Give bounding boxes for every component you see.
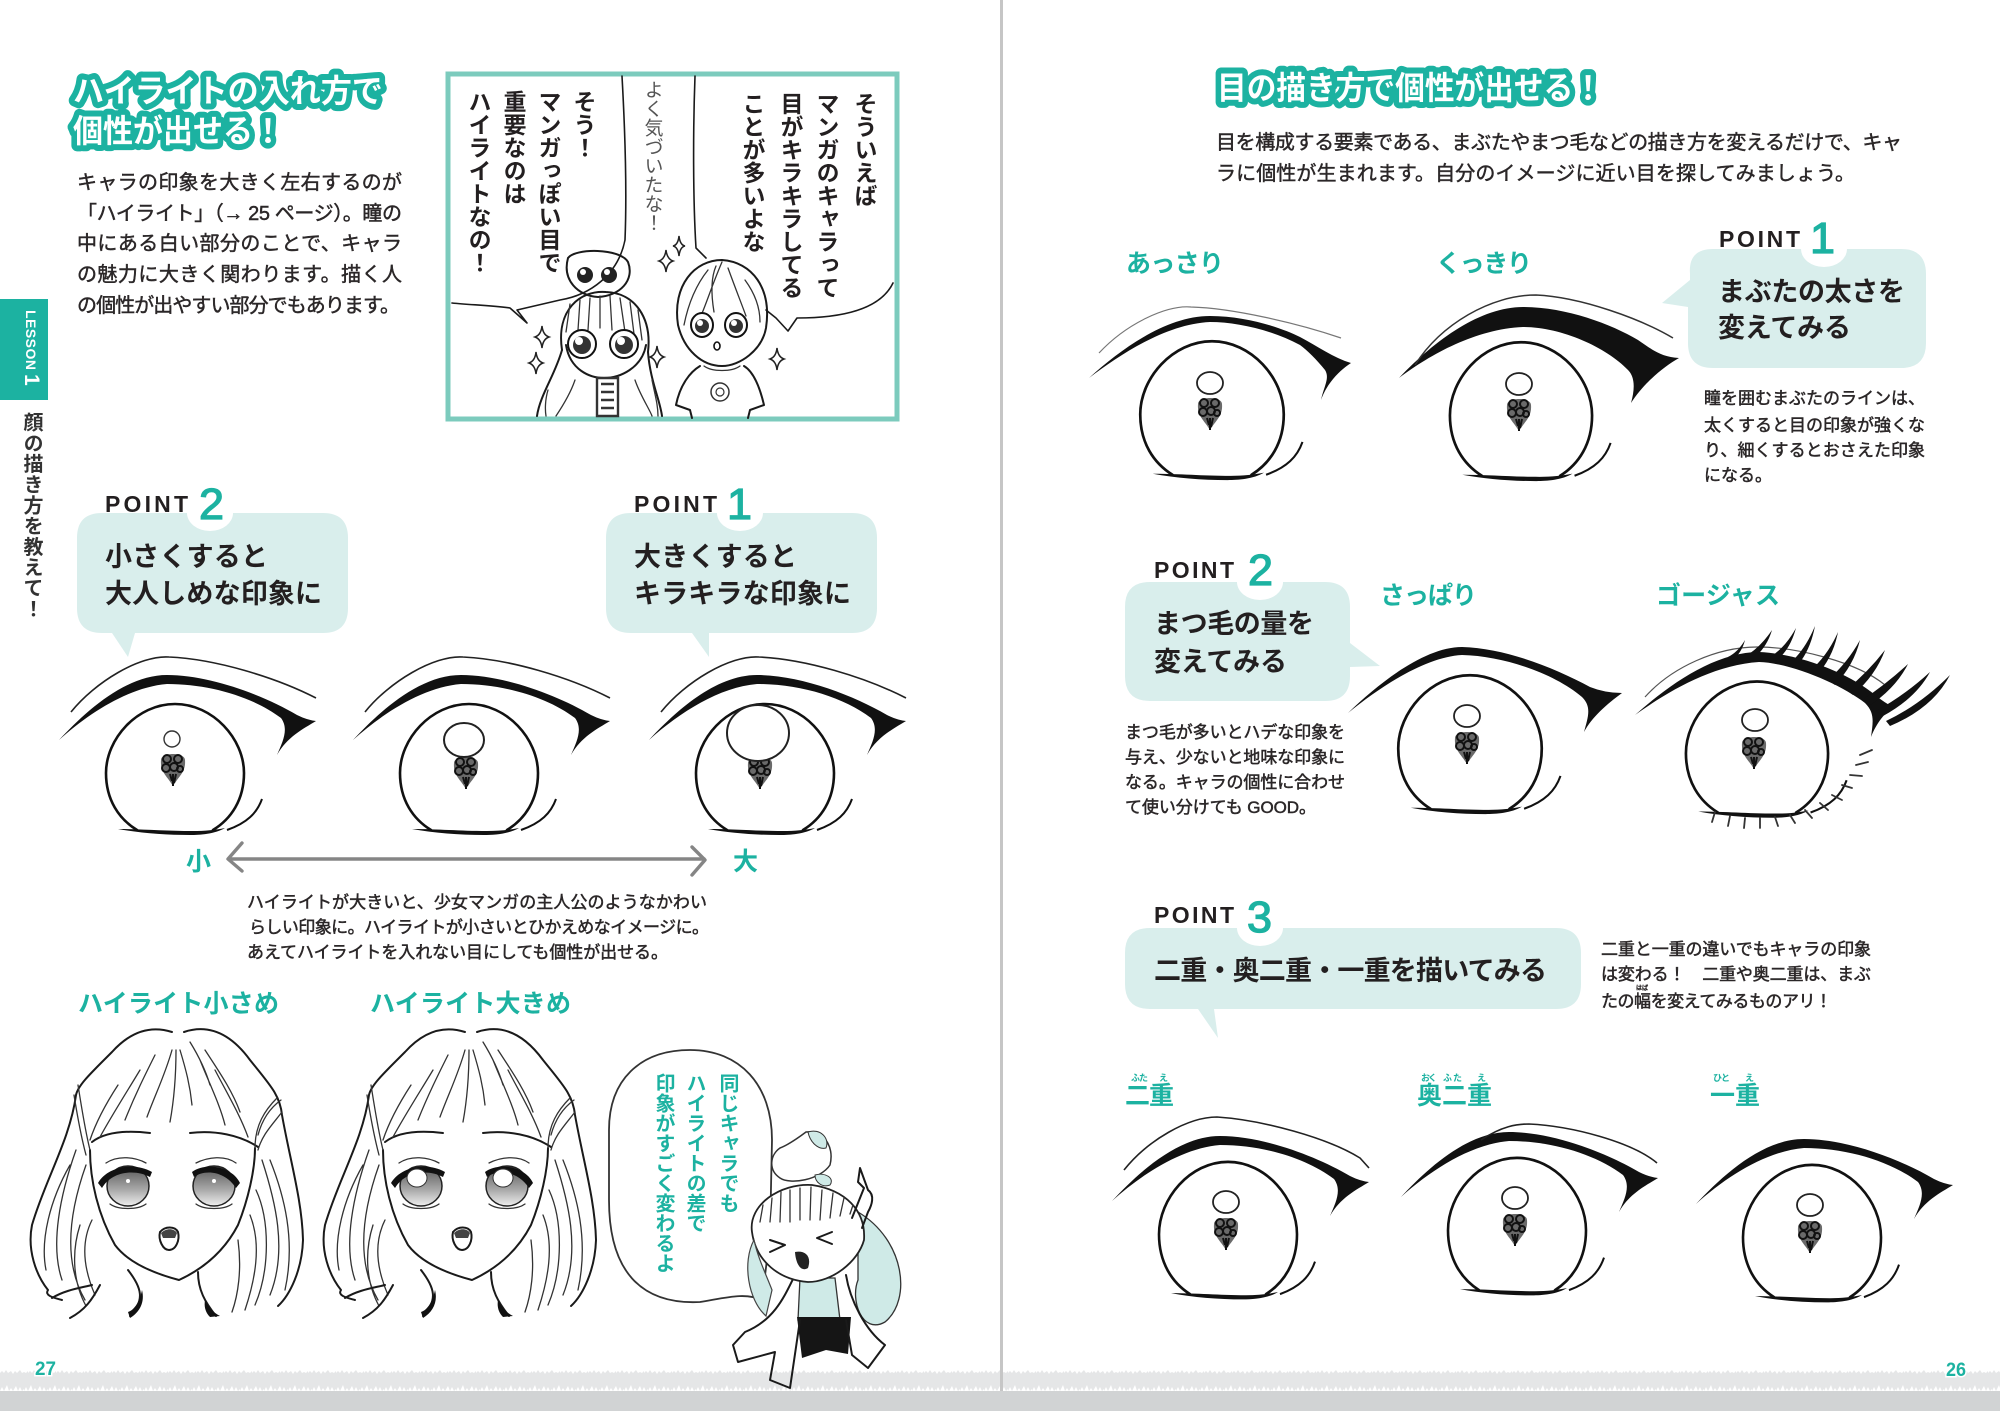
- heading: double eyelid: え: [1159, 1073, 1168, 1083]
- heading: double eyelid: ふた: [1131, 1073, 1148, 1083]
- text: lash note: なる。キャラの個性に合わせ: [1125, 773, 1345, 792]
- heading: single eyelid: 一重: [1710, 1082, 1760, 1110]
- sparkles: [529, 236, 784, 374]
- text: highlight size explanation: ハイライトが大きいと、少女マンガの主人公のようなかわい: [247, 893, 707, 912]
- callout: point 2 right: まつ毛の量を: [1154, 609, 1314, 639]
- sidebar tab: lesson 1: [0, 299, 48, 400]
- callout: point 1 left: キラキラな印象に: [634, 579, 851, 609]
- eye: thick lid: [1399, 295, 1679, 481]
- left title: ハイライトの入れ方で: [73, 73, 383, 109]
- heading: plain lashes: さっぱり: [1380, 582, 1477, 610]
- callout: point 1 left: POINT: [634, 491, 717, 517]
- arrow: small to large: [228, 843, 705, 875]
- text: eyelid thickness note: り、細くするとおさえた印象: [1704, 441, 1925, 460]
- text: eyelid thickness note: [1704, 389, 1925, 485]
- callout: point 1 right: POINT: [1719, 226, 1800, 252]
- callout: point 3: 3: [1247, 893, 1272, 942]
- footer torn-paper band: [0, 1370, 2000, 1411]
- heading: inner double eyelid: え: [1477, 1073, 1486, 1083]
- left intro text: の魅力に大きく関わります。描く人: [77, 263, 402, 286]
- left title: 個性が出せる！: [73, 113, 283, 149]
- callout: point 1 left: 1: [727, 480, 752, 529]
- callout: point 1 right: 変えてみる: [1718, 313, 1851, 343]
- speech: boy: マンガのキャラって: [813, 92, 839, 299]
- speech: girl: マンガっぽい目で: [535, 90, 561, 274]
- speech bubble: same character comment: 印象がすごく変わるよ: [652, 1073, 675, 1273]
- sidebar vertical chapter title: 顔の描き方を教えて！: [20, 412, 43, 619]
- eye: few lashes: [1348, 647, 1622, 814]
- heading: inner double eyelid: おく: [1421, 1073, 1437, 1083]
- callout: point 2 right: 2: [1248, 546, 1273, 595]
- eye: many lashes: [1635, 626, 1950, 828]
- speech bubble: same character comment: 同じキャラでも: [716, 1073, 738, 1213]
- text: eyelid thickness note: 太くすると目の印象が強くな: [1704, 416, 1925, 435]
- callout: point 1 right: 1: [1810, 214, 1835, 263]
- text: lash note: 与え、少ないと地味な印象に: [1125, 748, 1345, 767]
- callout: point 2 left: 2: [199, 480, 224, 529]
- eye: small highlight: [59, 657, 316, 835]
- text: eyelid thickness note: になる。: [1704, 466, 1772, 485]
- eye: medium highlight: [353, 657, 610, 835]
- text: lash note: まつ毛が多いとハデな印象を: [1125, 722, 1345, 742]
- lower lashes: [1712, 750, 1872, 828]
- callout: point 1 right: [1662, 214, 1926, 368]
- speech bubble: same character comment: ハイライトの差で: [683, 1073, 706, 1233]
- right title: 目の描き方で個性が出せる！: [1217, 70, 1603, 106]
- callout: point 1 left: 大きくすると: [634, 542, 797, 572]
- character: boy: [676, 260, 767, 418]
- speech: mascot aside: よく気づいたな！: [642, 80, 663, 232]
- eye: single eyelid: [1696, 1139, 1953, 1302]
- text: eyelid type note: は変わる！ 二重や奥二重は、まぶ: [1601, 965, 1871, 984]
- speech: girl: [465, 90, 596, 274]
- speech: boy: 目がキラキラしてる: [777, 92, 803, 299]
- heading: inner double eyelid: ふた: [1443, 1073, 1462, 1083]
- callout: point 2 left: 大人しめな印象に: [105, 579, 322, 609]
- sidebar tab: lesson 1: LESSON: [23, 310, 39, 370]
- text: highlight size explanation: らしい印象に。ハイライトが小さいとひかえめなイメージに。: [249, 918, 709, 937]
- heading: bold eyelid: くっきり: [1436, 250, 1532, 278]
- right intro text: 目を構成する要素である、まぶたやまつ毛などの描き方を変えるだけで、キャ: [1216, 131, 1902, 154]
- text: eyelid type note: [1601, 940, 1871, 1011]
- callout: point 2 right: [1125, 546, 1380, 701]
- text: eyelid type note: 二重と一重の違いでもキャラの印象: [1601, 940, 1871, 959]
- left intro text: の個性が出やすい部分でもあります。: [77, 294, 400, 317]
- speech bubble outlines: [452, 76, 893, 331]
- speech: girl: そう！: [570, 90, 596, 159]
- speech: boy: [739, 92, 877, 299]
- left title: [73, 73, 383, 149]
- character: chibi girl pointing: [733, 1131, 901, 1388]
- eye: double eyelid: [1112, 1117, 1369, 1299]
- left intro text: キャラの印象を大きく左右するのが: [77, 171, 402, 194]
- left intro text: 中にある白い部分のことで、キャラ: [77, 232, 402, 255]
- speech bubble: same character comment: [609, 1050, 772, 1302]
- callout: point 1 right: まぶたの太さを: [1718, 277, 1905, 307]
- text: lash note: て使い分けても GOOD。: [1125, 797, 1316, 817]
- callout: point 2 left: [77, 480, 348, 657]
- right intro text: [1216, 131, 1902, 185]
- speech: girl: 重要なのは: [500, 90, 526, 205]
- label: small: 小: [186, 848, 211, 876]
- eye: thin lid: [1089, 307, 1351, 480]
- text: highlight size explanation: あえてハイライトを入れない目にしても個性が出せる。: [247, 943, 668, 962]
- heading: gorgeous lashes: ゴージャス: [1656, 581, 1780, 610]
- panel: manga conversation: [448, 74, 897, 419]
- callout: point 3: [1125, 893, 1581, 1038]
- left intro text: 「ハイライト」（→ 25 ページ）。瞳の: [77, 202, 402, 225]
- text: highlight size explanation: [247, 893, 709, 962]
- speech: boy: ことが多いよな: [739, 92, 765, 253]
- page number 27: 27: [35, 1359, 56, 1380]
- callout: point 2 right: 変えてみる: [1154, 647, 1287, 677]
- eye: large highlight: [649, 657, 906, 835]
- text: eyelid thickness note: 瞳を囲むまぶたのラインは、: [1704, 389, 1925, 408]
- heading: inner double eyelid: 奥二重: [1417, 1082, 1492, 1110]
- centre gutter line: [1000, 0, 1003, 1391]
- text: eyelid type note: はば: [1636, 984, 1648, 992]
- callout: point 1 left: [606, 480, 877, 657]
- sidebar tab: lesson 1: 1: [20, 374, 43, 386]
- heading: single eyelid: ひと: [1713, 1073, 1730, 1083]
- character: girl with mascot: [537, 251, 662, 416]
- callout: point 2 left: 小さくすると: [105, 542, 268, 572]
- speech: girl: ハイライトなの！: [465, 90, 491, 274]
- right intro text: ラに個性が生まれます。自分のイメージに近い目を探してみましょう。: [1216, 162, 1855, 185]
- heading: light eyelid: あっさり: [1126, 250, 1224, 278]
- page number 26: 26: [1946, 1360, 1966, 1381]
- callout: point 2 right: POINT: [1154, 557, 1234, 583]
- face: small highlight: [31, 1029, 303, 1318]
- heading: single eyelid: え: [1745, 1073, 1754, 1083]
- heading: double eyelid: 二重: [1125, 1082, 1174, 1110]
- heading: small highlight: ハイライト小さめ: [78, 990, 279, 1018]
- heading: large highlight: ハイライト大きめ: [370, 990, 571, 1018]
- left intro text: [77, 171, 402, 317]
- speech: boy: そういえば: [851, 92, 877, 207]
- face: large highlight: [324, 1029, 596, 1318]
- callout: point 3: 二重・奥二重・一重を描いてみる: [1154, 956, 1547, 986]
- upper lashes: [1728, 626, 1950, 726]
- callout: point 3: POINT: [1154, 902, 1234, 928]
- text: eyelid type note: たの幅を変えてみるものアリ！: [1601, 992, 1832, 1011]
- text: lash note: [1125, 722, 1345, 817]
- label: large: 大: [733, 848, 758, 876]
- eye: inner double eyelid: [1401, 1124, 1658, 1295]
- callout: point 2 left: POINT: [105, 491, 188, 517]
